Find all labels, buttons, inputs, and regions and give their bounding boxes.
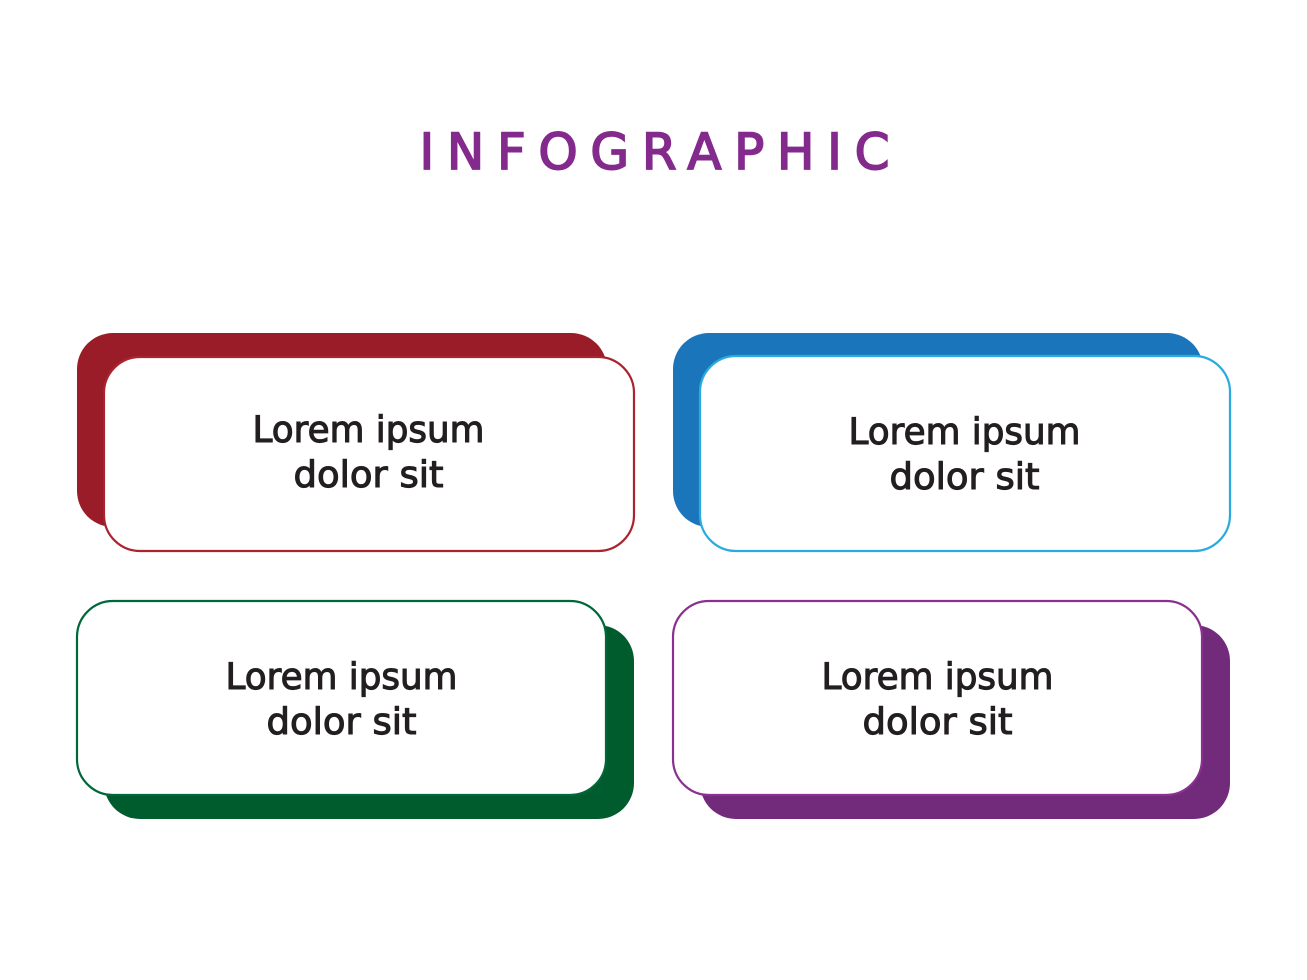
text: blue card label: Lorem ipsum: [848, 410, 1080, 453]
text: purple card label: [822, 655, 1054, 743]
text: purple card label: Lorem ipsum: [822, 655, 1054, 698]
panel: red card: [77, 333, 634, 551]
text: red card label: dolor sit: [294, 453, 444, 496]
text: green card label: [226, 655, 458, 743]
text: red card label: [252, 408, 484, 496]
text: green card label: Lorem ipsum: [226, 655, 458, 698]
text: blue card label: dolor sit: [890, 455, 1040, 498]
panel: purple card: [673, 601, 1230, 819]
panel: green card: [77, 601, 634, 819]
panel: blue card: [673, 333, 1230, 551]
title: INFOGRAPHIC: [420, 123, 890, 181]
text: green card label: dolor sit: [266, 700, 416, 743]
text: blue card label: [848, 410, 1080, 498]
text: red card label: Lorem ipsum: [252, 408, 484, 451]
text: purple card label: dolor sit: [862, 700, 1012, 743]
